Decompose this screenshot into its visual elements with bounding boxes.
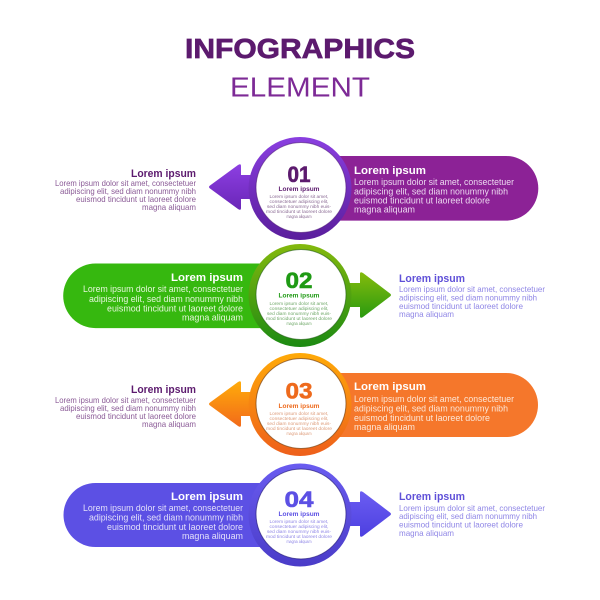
arrow: left bbox=[209, 164, 258, 210]
pill text: euismod tincidunt ut laoreet dolore bbox=[354, 196, 490, 206]
arrow: left bbox=[209, 381, 258, 427]
circle text: sed diam nonummy nibh euis- bbox=[267, 421, 331, 426]
pill text: magna aliquam bbox=[354, 422, 415, 432]
circle text: consectetuer adipiscing elit, bbox=[270, 416, 328, 421]
number: 01 bbox=[288, 162, 310, 187]
side text: Lorem ipsum dolor sit amet, consectetuer bbox=[399, 503, 545, 513]
ring bbox=[248, 244, 352, 347]
side text bbox=[399, 273, 545, 319]
side text: Lorem ipsum bbox=[131, 168, 196, 180]
arrow: right bbox=[342, 491, 391, 537]
pill text: Lorem ipsum dolor sit amet, consectetuer bbox=[83, 284, 243, 294]
side text: magna aliquam bbox=[399, 528, 454, 538]
inner circle bbox=[256, 469, 346, 559]
pill text: adipiscing elit, sed diam nonummy nibh bbox=[354, 186, 508, 196]
side text: magna aliquam bbox=[142, 202, 196, 212]
side text: euismod tincidunt ut laoreet dolore bbox=[399, 520, 523, 530]
pill text: magna aliquam bbox=[354, 204, 415, 214]
circle text: consectetuer adipiscing elit, bbox=[270, 524, 328, 529]
pill text: Lorem ipsum bbox=[354, 165, 426, 177]
circle text: magna aliquam bbox=[286, 431, 312, 436]
side text: Lorem ipsum bbox=[399, 491, 465, 503]
side text: Lorem ipsum dolor sit amet, consectetuer bbox=[55, 178, 196, 188]
circle text: Lorem ipsum dolor sit amet, bbox=[270, 194, 328, 199]
pill text: euismod tincidunt ut laoreet dolore bbox=[354, 413, 490, 423]
pill text: adipiscing elit, sed diam nonummy nibh bbox=[354, 404, 508, 414]
pill text bbox=[83, 272, 243, 322]
circle heading: Lorem ipsum bbox=[278, 186, 320, 193]
side text: euismod tincidunt ut laoreet dolore bbox=[76, 411, 196, 421]
ring bbox=[248, 464, 352, 566]
circle text: mod tincidunt ut laoreet dolore bbox=[266, 534, 332, 539]
pill text: adipiscing elit, sed diam nonummy nibh bbox=[89, 512, 243, 522]
side text: adipiscing elit, sed diam nonummy nibh bbox=[399, 292, 537, 302]
side text: Lorem ipsum dolor sit amet, consectetuer bbox=[55, 395, 196, 405]
arrow: right bbox=[342, 272, 391, 318]
pill text: Lorem ipsum bbox=[171, 491, 243, 503]
circle heading: Lorem ipsum bbox=[278, 511, 320, 518]
number: 04 bbox=[284, 487, 314, 512]
circle heading: Lorem ipsum bbox=[278, 292, 320, 300]
circle text: Lorem ipsum dolor sit amet, bbox=[270, 519, 328, 524]
circle text: magna aliquam bbox=[286, 214, 312, 219]
circle text: Lorem ipsum dolor sit amet, bbox=[270, 301, 328, 306]
step 3 bbox=[55, 353, 538, 456]
side text: adipiscing elit, sed diam nonummy nibh bbox=[60, 403, 196, 413]
side text: adipiscing elit, sed diam nonummy nibh bbox=[60, 186, 196, 196]
ring bbox=[248, 353, 352, 456]
panel: blue pill bbox=[64, 483, 300, 547]
side text: magna aliquam bbox=[142, 419, 196, 429]
pill text bbox=[354, 165, 514, 214]
side text: Lorem ipsum bbox=[131, 384, 196, 396]
step 4 bbox=[64, 464, 545, 566]
circle text: sed diam nonummy nibh euis- bbox=[267, 311, 331, 316]
pill text: Lorem ipsum dolor sit amet, consectetuer bbox=[354, 394, 514, 404]
pill text bbox=[83, 491, 243, 541]
circle text bbox=[266, 519, 332, 544]
pill text: Lorem ipsum bbox=[171, 272, 243, 284]
circle text: magna aliquam bbox=[286, 539, 312, 544]
panel: orange pill bbox=[300, 373, 538, 437]
panel: green pill bbox=[63, 264, 300, 328]
circle text: mod tincidunt ut laoreet dolore bbox=[266, 426, 332, 431]
side text: Lorem ipsum dolor sit amet, consectetuer bbox=[399, 284, 545, 294]
circle text: mod tincidunt ut laoreet dolore bbox=[266, 316, 332, 321]
circle text: Lorem ipsum dolor sit amet, bbox=[270, 411, 328, 416]
circle text: sed diam nonummy nibh euis- bbox=[267, 529, 331, 534]
side text bbox=[55, 168, 196, 212]
pill text: Lorem ipsum bbox=[354, 381, 426, 393]
pill text: Lorem ipsum dolor sit amet, consectetuer bbox=[354, 177, 514, 187]
pill text: Lorem ipsum dolor sit amet, consectetuer bbox=[83, 503, 243, 513]
number: 02 bbox=[286, 268, 312, 293]
side text: euismod tincidunt ut laoreet dolore bbox=[76, 194, 196, 204]
pill text: euismod tincidunt ut laoreet dolore bbox=[107, 522, 243, 532]
circle heading: Lorem ipsum bbox=[278, 403, 320, 410]
side text: euismod tincidunt ut laoreet dolore bbox=[399, 301, 523, 311]
circle text bbox=[266, 411, 332, 436]
panel: purple pill bbox=[300, 156, 538, 221]
circle text: sed diam nonummy nibh euis- bbox=[267, 204, 331, 209]
pill text: magna aliquam bbox=[182, 312, 243, 322]
circle text bbox=[266, 194, 332, 219]
inner circle bbox=[256, 142, 346, 232]
circle text bbox=[266, 301, 332, 326]
pill text: euismod tincidunt ut laoreet dolore bbox=[107, 304, 243, 314]
title bbox=[185, 33, 415, 102]
title: INFOGRAPHICS bbox=[185, 33, 415, 64]
circle text: magna aliquam bbox=[286, 321, 312, 326]
subtitle: ELEMENT bbox=[230, 72, 370, 102]
pill text: adipiscing elit, sed diam nonummy nibh bbox=[89, 294, 243, 304]
side text: Lorem ipsum bbox=[399, 273, 465, 285]
inner circle bbox=[256, 250, 346, 340]
step 1 bbox=[55, 137, 538, 240]
circle text: consectetuer adipiscing elit, bbox=[270, 306, 328, 311]
inner circle bbox=[256, 358, 346, 448]
circle text: consectetuer adipiscing elit, bbox=[270, 199, 328, 204]
step 2 bbox=[63, 244, 545, 347]
pill text bbox=[354, 381, 514, 432]
side text: adipiscing elit, sed diam nonummy nibh bbox=[399, 511, 537, 521]
side text bbox=[55, 384, 196, 429]
side text bbox=[399, 491, 545, 538]
number: 03 bbox=[286, 378, 312, 404]
side text: magna aliquam bbox=[399, 309, 454, 319]
pill text: magna aliquam bbox=[182, 531, 243, 541]
circle text: mod tincidunt ut laoreet dolore bbox=[266, 209, 332, 214]
ring bbox=[248, 137, 352, 240]
